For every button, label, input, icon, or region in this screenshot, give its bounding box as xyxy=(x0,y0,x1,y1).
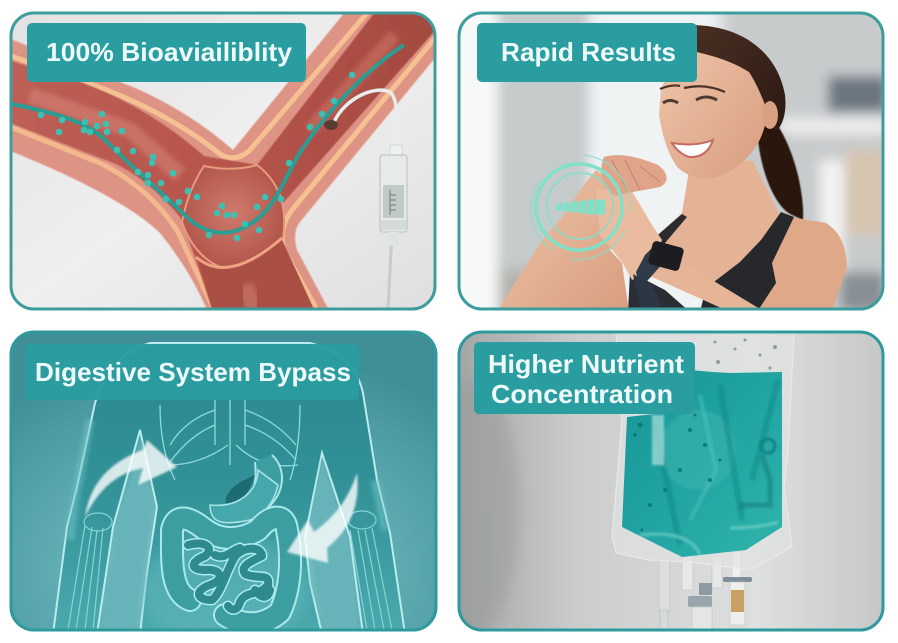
smile xyxy=(672,140,713,157)
infusion tube xyxy=(333,88,398,122)
photo: IV bag with teal fluid xyxy=(420,331,884,640)
panel: 100% bioavailability xyxy=(8,12,440,312)
panel border xyxy=(11,13,435,309)
gap shading beside torso xyxy=(128,440,327,592)
arm across body xyxy=(652,263,758,308)
vessel orange stripes xyxy=(8,12,368,158)
face xyxy=(659,52,765,178)
hands xyxy=(601,155,667,196)
vessel walls xyxy=(8,12,440,312)
fluid texture xyxy=(640,380,778,555)
vessel lumen xyxy=(8,12,440,312)
hair xyxy=(690,25,785,132)
stomach xyxy=(219,455,282,522)
stomach lower lobe xyxy=(210,470,278,523)
body silhouette xyxy=(53,343,405,634)
smart watch xyxy=(633,240,685,308)
panel: rapid results xyxy=(450,5,890,317)
air bubbles xyxy=(714,338,777,370)
soft background shadow xyxy=(420,380,520,640)
label: Higher Nutrient Concentration: Higher Nutrient xyxy=(488,349,684,379)
photo: smiling woman with watch and pulse ring xyxy=(460,14,882,308)
ear xyxy=(762,101,778,129)
near forearm xyxy=(596,188,662,280)
teal catheter line xyxy=(12,45,404,233)
pulse ring xyxy=(531,155,630,260)
nutrient particles xyxy=(38,72,355,241)
panel border xyxy=(459,332,883,630)
far arm xyxy=(497,170,629,312)
label: 100% Bioaviailiblity xyxy=(27,23,306,82)
panel border xyxy=(11,332,436,630)
panel: digestive system bypass xyxy=(10,331,437,643)
catheter tip xyxy=(324,120,338,130)
shoulder xyxy=(760,218,847,308)
label: Rapid Results xyxy=(477,23,697,82)
blurred room background xyxy=(460,14,882,308)
eyebrows and eyes xyxy=(660,85,725,92)
fluid xyxy=(622,370,782,557)
arrow: right curved bypass xyxy=(287,473,358,563)
panel: higher nutrient concentration xyxy=(420,331,884,640)
tank top xyxy=(700,212,794,312)
infusion filter xyxy=(380,145,407,246)
vessel bulge xyxy=(182,165,284,271)
panel border xyxy=(459,13,883,309)
tubes xyxy=(659,552,740,631)
fluid bubbles xyxy=(633,414,722,532)
ponytail xyxy=(758,126,804,220)
lower vessel xyxy=(198,240,315,312)
small intestine xyxy=(188,543,270,609)
arm shading xyxy=(70,420,385,540)
label: Digestive System Bypass: Digestive System Bypass xyxy=(35,357,351,387)
illustration: translucent torso with digestive tract xyxy=(10,331,437,643)
amber port xyxy=(723,577,752,631)
label: Rapid Results: Rapid Results xyxy=(501,37,676,67)
IV bag xyxy=(612,333,794,570)
label: Higher Nutrient Concentration: Concentration xyxy=(491,379,673,409)
label: Higher Nutrient Concentration xyxy=(474,342,695,414)
illustration: blood vessel with nutrient particles xyxy=(8,12,440,312)
arrow: left curved bypass xyxy=(85,440,177,517)
forearm bones xyxy=(68,511,392,630)
gray connector xyxy=(688,583,712,631)
lumen highlights xyxy=(30,95,180,175)
label: 100% Bioaviailiblity: 100% Bioaviailiblity xyxy=(46,37,293,67)
neck and chest xyxy=(650,160,794,282)
label: Digestive System Bypass xyxy=(25,344,359,400)
belly glow xyxy=(142,538,314,628)
rib cage xyxy=(160,400,300,480)
large intestine xyxy=(172,518,290,623)
